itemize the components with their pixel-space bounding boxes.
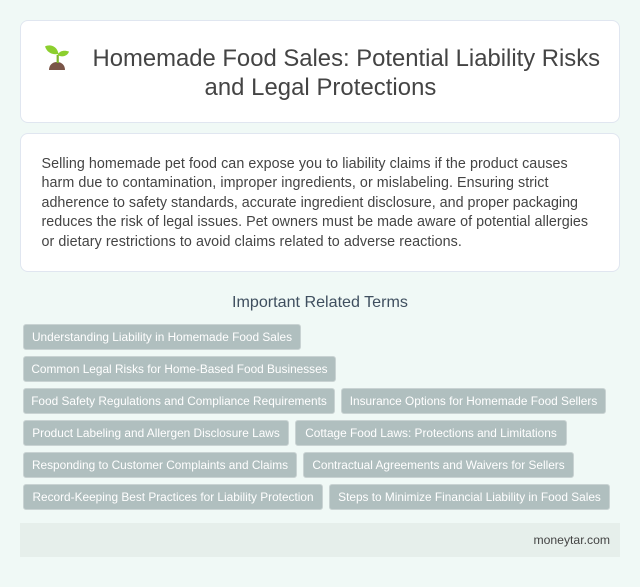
title: Homemade Food Sales: Potential Liability Risks (92, 44, 600, 72)
chip (23, 324, 301, 350)
footer source text: moneytar.com (533, 533, 610, 547)
description text: reduces the risk of legal issues. Pet owners must be made aware of potential allergies (42, 214, 588, 230)
chip (295, 420, 567, 446)
chip: Product Labeling and Allergen Disclosure Laws (32, 426, 280, 440)
chip (23, 420, 289, 446)
description text (42, 156, 588, 250)
chip (23, 484, 323, 510)
chip: Cottage Food Laws: Protections and Limitations (305, 426, 557, 440)
description text: Selling homemade pet food can expose you to liability claims if the product causes (42, 156, 568, 172)
chip: Common Legal Risks for Home-Based Food Businesses (31, 362, 328, 376)
chip: Steps to Minimize Financial Liability in Food Sales (338, 490, 601, 504)
chip (23, 356, 336, 382)
chip (303, 452, 574, 478)
panel: related term chips (23, 324, 610, 510)
chip (329, 484, 610, 510)
chip (341, 388, 606, 414)
chip: Food Safety Regulations and Compliance Requirements (31, 394, 327, 408)
panel: title card (20, 20, 620, 123)
chip (23, 452, 297, 478)
chip: Responding to Customer Complaints and Claims (32, 458, 288, 472)
heading: related terms: Important Related Terms (232, 292, 408, 310)
footer bar (20, 523, 620, 557)
chip: Understanding Liability in Homemade Food Sales (32, 330, 292, 344)
chip: Insurance Options for Homemade Food Sellers (350, 394, 597, 408)
chip: Contractual Agreements and Waivers for Sellers (312, 458, 565, 472)
title: and Legal Protections (204, 74, 436, 101)
chip (23, 388, 335, 414)
icon: seedling (45, 45, 69, 70)
chip: Record-Keeping Best Practices for Liability Protection (32, 490, 314, 504)
title (92, 44, 600, 101)
description text: harm due to contamination, improper ingredients, or mislabeling. Ensuring strict (42, 175, 549, 191)
description text: or dietary restrictions to avoid claims related to adverse reactions. (42, 234, 462, 250)
description text: adherence to safety standards, accurate ingredient disclosure, and proper packaging (42, 195, 578, 211)
panel: description card (20, 133, 620, 272)
